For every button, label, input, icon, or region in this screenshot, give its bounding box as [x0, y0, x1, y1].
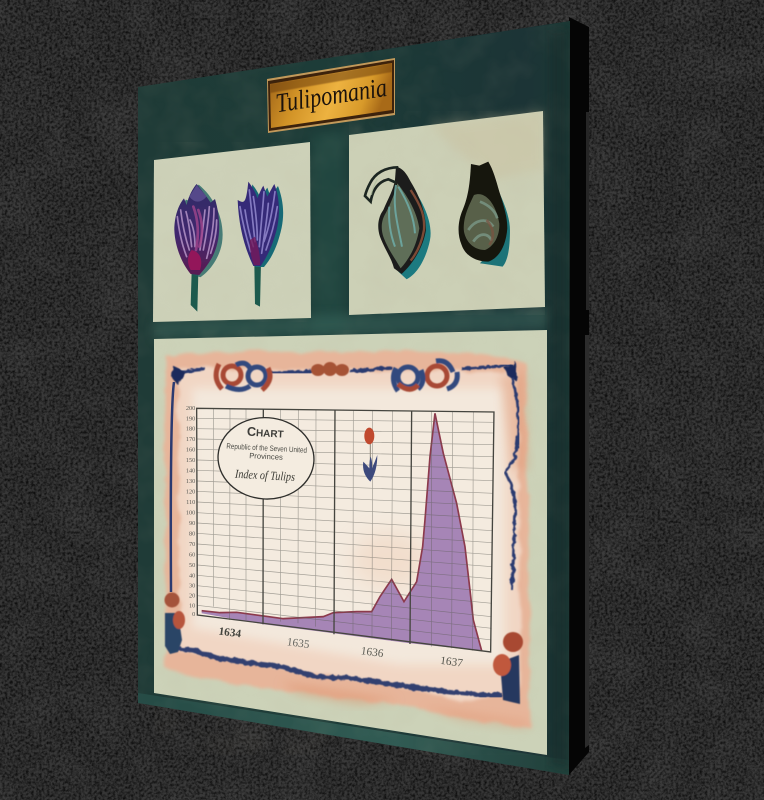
- side scroll lines: [171, 382, 174, 592]
- y axis labels: 150: [186, 457, 195, 464]
- x axis year labels: 1636: [360, 645, 385, 660]
- chart legend oval: Republic of the Seven United: [226, 442, 307, 455]
- knots: right pair: [393, 361, 457, 391]
- line chart: Index of Tulips: [186, 405, 494, 670]
- chart legend oval: [215, 414, 317, 502]
- panel: tulip bulbs: [349, 111, 545, 315]
- ornamental scroll border: [164, 361, 523, 704]
- y axis labels: 10: [189, 602, 195, 609]
- y axis labels: 200: [186, 405, 195, 412]
- canvas side edge: [569, 17, 589, 775]
- y axis labels: [186, 405, 195, 618]
- y axis labels: 60: [189, 551, 195, 558]
- y axis labels: 20: [189, 593, 195, 600]
- cherub bottom right: [493, 632, 523, 704]
- center red knot: [311, 362, 349, 376]
- bottom scroll line: [170, 648, 502, 695]
- title text: Tulipomania: [274, 72, 389, 118]
- title plate: [267, 58, 395, 133]
- price area: [202, 413, 482, 651]
- y axis labels: 50: [189, 562, 195, 569]
- y axis labels: 190: [186, 416, 195, 423]
- icon: dark bulb: [459, 162, 510, 267]
- y axis labels: 100: [186, 510, 195, 517]
- corner ornaments: [172, 362, 517, 385]
- y axis labels: 80: [189, 530, 195, 537]
- y axis labels: 170: [186, 436, 195, 443]
- icon: light bulb with root: [365, 167, 431, 279]
- chart legend oval: Provinces: [249, 451, 283, 462]
- canvas front panel: [130, 15, 580, 785]
- parchment with pink border: [165, 351, 530, 728]
- y axis labels: 140: [186, 467, 195, 474]
- chart legend oval: CHART: [247, 425, 284, 441]
- panel: price chart: [154, 330, 547, 755]
- cherub bottom left: [164, 592, 185, 654]
- y axis labels: 110: [186, 499, 195, 506]
- y axis labels: 0: [192, 611, 195, 618]
- y axis labels: 70: [189, 541, 195, 548]
- top scroll line: [175, 365, 512, 373]
- x axis year labels: 1634: [218, 626, 242, 640]
- chart legend oval: Index of Tulips: [234, 467, 296, 484]
- x axis year labels: 1635: [286, 636, 311, 651]
- y axis labels: 160: [186, 446, 195, 453]
- icon: red tulip: [363, 428, 377, 482]
- y axis labels: 40: [189, 572, 195, 579]
- y axis labels: 180: [186, 426, 195, 433]
- icon: round tulip flower: [174, 184, 223, 312]
- y axis labels: 130: [186, 478, 195, 485]
- y axis labels: 120: [186, 488, 195, 495]
- panel: tulip flowers: [153, 142, 311, 322]
- knots: left pair: [216, 363, 270, 390]
- y axis labels: 30: [189, 583, 195, 590]
- grid frame: [197, 408, 494, 652]
- chart background: [197, 408, 494, 652]
- x axis year labels: 1637: [439, 655, 464, 670]
- x axis year labels: [218, 626, 464, 670]
- y axis labels: 90: [189, 520, 195, 527]
- icon: pointed tulip flower: [238, 182, 283, 307]
- grid lines: [197, 409, 494, 651]
